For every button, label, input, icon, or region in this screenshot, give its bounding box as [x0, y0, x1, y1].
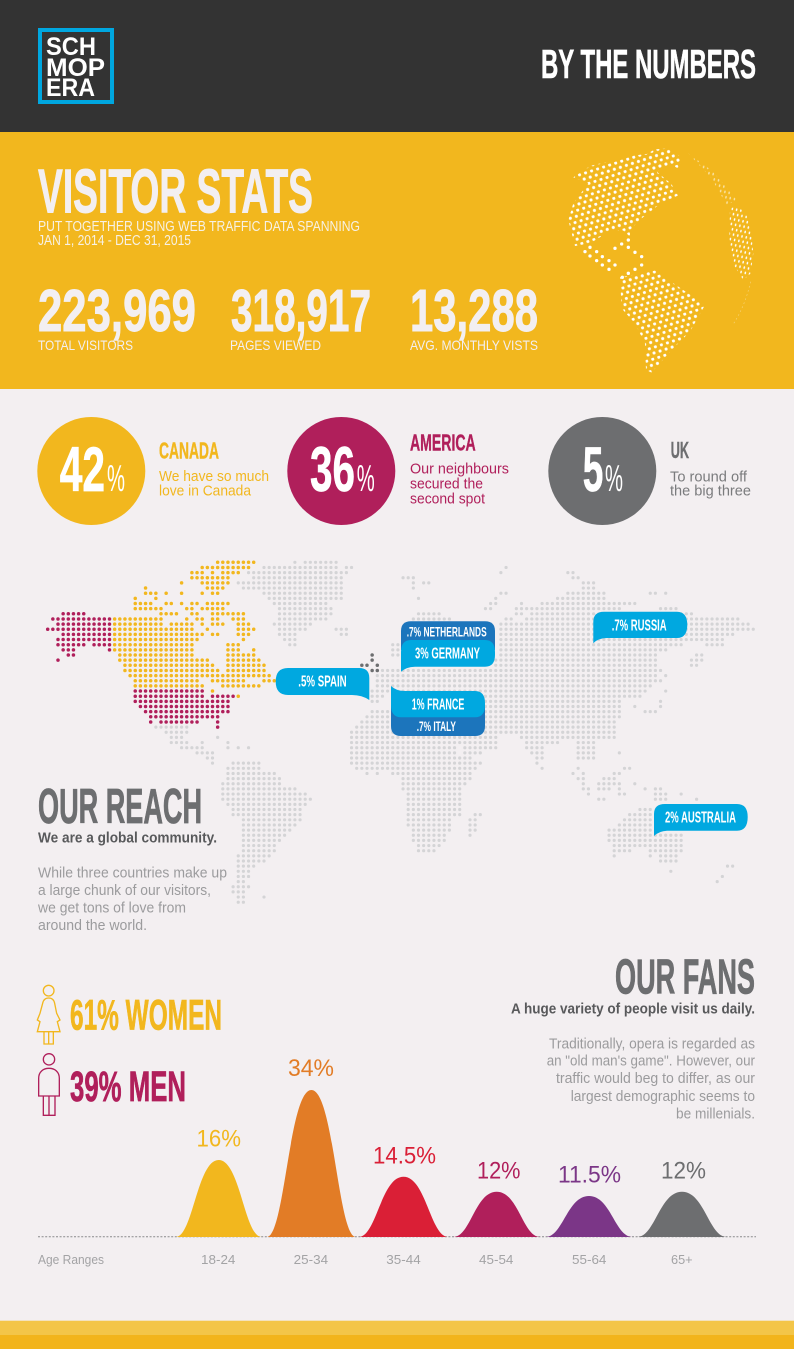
bar: 65+: 12%: [661, 1158, 706, 1185]
text: UK note: the big three: [670, 483, 751, 500]
paragraph: we get tons of love from: [37, 900, 186, 917]
circle: 5%: 5: [583, 435, 603, 505]
bar: 25-34: 34%: [288, 1055, 334, 1082]
icon: dotted globe: [568, 148, 753, 373]
bar: 35-44: 14.5%: [373, 1142, 436, 1169]
logo: [40, 30, 112, 102]
stat: men: [39, 1054, 186, 1115]
icon: woman: [37, 985, 60, 1044]
stat: avg monthly visits: AVG. MONTHLY VISTS: [410, 337, 538, 353]
heading: America: AMERICA: [410, 430, 476, 456]
circle: 36%: 36: [310, 435, 355, 505]
subtitle: JAN 1, 2014 - DEC 31, 2015: [38, 233, 191, 249]
callout: Netherlands and Germany: .7% NETHERLANDS: [407, 624, 487, 640]
chart: age range distribution: [38, 1055, 756, 1267]
map: Greenland dots: [238, 562, 352, 645]
heading: Canada: CANADA: [159, 437, 219, 463]
logo: SCH: [46, 33, 96, 61]
heading: visitor stats: VISITOR STATS: [38, 158, 313, 227]
bar: 45-54: 12%: [477, 1158, 520, 1185]
bar: 65+: [637, 1158, 727, 1267]
map: United States dots: [48, 614, 234, 727]
text: America note: [410, 460, 509, 507]
bar: 45-54: [453, 1158, 540, 1267]
header bar: [0, 0, 794, 132]
stat: avg monthly visits: 13,288: [410, 277, 538, 344]
bar: 35-44: 35-44: [386, 1252, 421, 1267]
callout: Spain: .5% SPAIN: [298, 674, 347, 691]
panel: Canada share: [37, 417, 269, 525]
circle: 5%: [548, 417, 656, 525]
icon: man: [39, 1054, 59, 1115]
bar: 18-24: 18-24: [201, 1252, 235, 1267]
bar: 65+: 65+: [671, 1252, 693, 1267]
bar: 55-64: 55-64: [572, 1252, 606, 1267]
text: UK note: To round off: [670, 468, 748, 485]
paragraph: around the world.: [38, 917, 147, 934]
text: America note: Our neighbours: [410, 460, 509, 477]
paragraph: a large chunk of our visitors,: [38, 882, 211, 899]
label: 61% women: 61% WOMEN: [70, 991, 222, 1039]
bar: 25-34: [267, 1055, 356, 1267]
text: Canada note: [159, 468, 269, 500]
text: Canada note: We have so much: [159, 468, 269, 485]
footer bands: [0, 1321, 794, 1349]
callout: France and Italy: [391, 686, 485, 736]
map: Asia-Pacific dots: [573, 768, 733, 882]
subtitle: [38, 219, 360, 249]
map: Eurasia and Africa dots: [352, 567, 754, 851]
circle: 42%: %: [107, 458, 125, 499]
bar: 18-24: 16%: [196, 1126, 241, 1153]
stat: total visitors: [38, 277, 196, 353]
callout: Russia: [593, 612, 687, 643]
callout: Australia: 2% AUSTRALIA: [665, 809, 736, 826]
stat: total visitors: TOTAL VISITORS: [38, 337, 133, 353]
circle: 5%: %: [605, 458, 623, 499]
stat: pages viewed: [230, 277, 371, 353]
stat: avg monthly visits: [410, 277, 538, 353]
subheading: A huge variety of people visit us daily.: [511, 1001, 755, 1017]
map: Canada dots: [115, 562, 275, 696]
text: Canada note: love in Canada: [159, 483, 252, 500]
panel: our fans text: [511, 949, 755, 1122]
circle: 42%: 42: [60, 435, 105, 505]
stat: total visitors: 223,969: [38, 277, 196, 344]
panel: America share: [287, 417, 509, 525]
map: UK dots: [362, 655, 378, 670]
map: Latin America dots: [156, 727, 311, 902]
text: UK note: [670, 468, 751, 500]
chart: dotted world map: [48, 562, 754, 902]
logo: MOP: [46, 54, 105, 82]
bar: 45-54: 45-54: [479, 1252, 513, 1267]
bar: 18-24: [176, 1126, 262, 1267]
callout: Russia: .7% RUSSIA: [612, 618, 667, 635]
panel: our reach text: [37, 779, 227, 934]
paragraph: While three countries make up: [38, 865, 227, 882]
heading: UK: UK: [671, 437, 689, 463]
subtitle: PUT TOGETHER USING WEB TRAFFIC DATA SPANNING: [38, 219, 360, 235]
paragraph: be millenials.: [676, 1105, 755, 1122]
callout: Australia: [654, 804, 748, 836]
text: America note: secured the: [410, 475, 483, 492]
paragraph: largest demographic seems to: [571, 1088, 755, 1105]
stat: pages viewed: PAGES VIEWED: [230, 337, 321, 353]
callout: Spain: [276, 668, 369, 700]
subheading: We are a global community.: [38, 831, 217, 847]
bar: 25-34: 25-34: [294, 1252, 328, 1267]
paragraph: traffic would beg to differ, as our: [556, 1070, 755, 1087]
circle: 42%: [37, 417, 145, 525]
circle: 36%: %: [357, 458, 375, 499]
bar: 35-44: [358, 1142, 448, 1267]
panel: UK share: [548, 417, 751, 525]
heading: our reach: OUR REACH: [38, 779, 202, 834]
circle: 36%: [287, 417, 395, 525]
stat: women: [37, 985, 222, 1044]
paragraph: [547, 1035, 755, 1122]
axis label: Age Ranges: [38, 1252, 104, 1267]
paragraph: [37, 865, 227, 934]
stat: pages viewed: 318,917: [231, 277, 371, 344]
paragraph: an "old man's game". However, our: [547, 1053, 755, 1070]
label: 39% men: 39% MEN: [70, 1063, 186, 1111]
callout: Netherlands and Germany: 3% GERMANY: [415, 646, 480, 663]
paragraph: Traditionally, opera is regarded as: [549, 1035, 755, 1052]
logo: ERA: [46, 74, 95, 102]
bar: 55-64: [546, 1162, 632, 1267]
callout: France and Italy: 1% FRANCE: [412, 697, 464, 714]
text: America note: second spot: [410, 490, 486, 507]
callout: France and Italy: .7% ITALY: [417, 719, 456, 734]
callout: Netherlands and Germany: [401, 621, 495, 672]
bar: 55-64: 11.5%: [558, 1162, 621, 1189]
panel: visitor stats: [0, 132, 794, 389]
